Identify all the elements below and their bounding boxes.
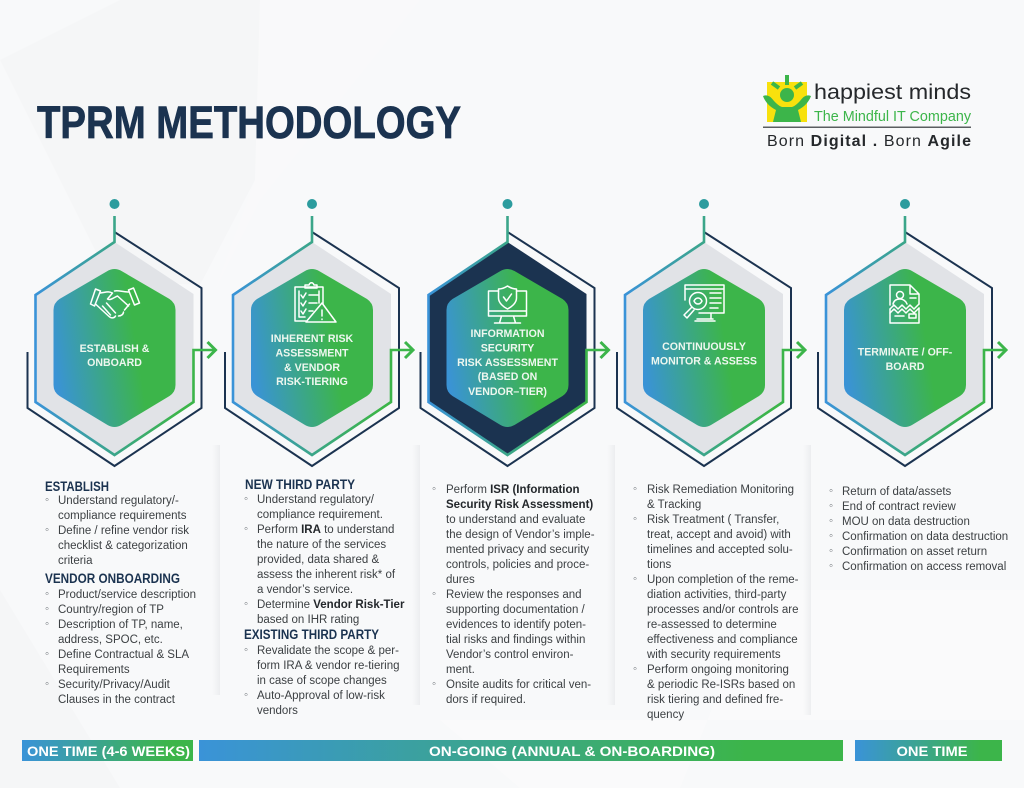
label: RISK-TIERING [276,376,348,388]
heading: establish: ESTABLISH [45,479,109,494]
existing third party list: ◦ [244,644,248,656]
text column 4: monitoring details: ◦ [633,513,637,525]
text column 3: ISR details: dors if required. [446,694,526,706]
text column 2: new and existing third party [244,477,405,717]
label: (BASED ON [478,371,537,383]
text column 3: ISR details: Security Risk Assessment) [446,499,593,511]
establish list: ◦ [45,494,49,506]
step 1: establish and onboard [28,199,216,466]
icon: handshake [90,288,140,318]
new third party list [244,493,405,626]
label: INFORMATION [471,328,544,340]
logo slogan: Born Digital . Born Agile [767,133,971,150]
title: TPRM METHODOLOGY [37,97,461,148]
vendor onboarding list: ◦ [45,603,49,615]
existing third party list: vendors [257,705,298,717]
heading: vendor onboarding: VENDOR ONBOARDING [45,571,180,586]
vendor onboarding list: Product/service description [58,589,196,601]
text column 3: ISR details: ◦ [432,588,436,600]
text column 4: monitoring details: re-assessed to determine [647,619,777,631]
text column 3: ISR details: ◦ [432,678,436,690]
text column 5: termination details: Confirmation on data destruction [842,531,1008,543]
text column 3: ISR details: ment. [446,664,475,676]
existing third party list: Revalidate the scope & per- [257,645,399,657]
vendor onboarding list: ◦ [45,588,49,600]
text column 4: monitoring details: timelines and accepted solu- [647,544,793,556]
vendor onboarding list: Clauses in the contract [58,694,176,706]
text column 3: ISR details: evidences to identify poten- [446,619,586,631]
timeline bar: on-going [199,740,843,761]
heading: new third party: NEW THIRD PARTY [245,477,355,492]
establish list: criteria [58,555,93,567]
logo wordmark: happiest minds [814,81,971,104]
text column 5: termination details: Confirmation on access removal [842,561,1006,573]
label: ASSESSMENT [276,348,349,360]
icon: monitor with magnifier [684,285,724,321]
text column 4: monitoring details: risk tiering and defined fre- [647,694,783,706]
icon: monitor with shield [488,286,526,323]
text column 5: termination details: ◦ [829,500,833,512]
vendor onboarding list: address, SPOC, etc. [58,634,163,646]
logo mark [763,75,811,122]
step 2: inherent risk assessment [225,199,413,466]
label: ONBOARD [87,357,142,369]
text column 5: termination details: ◦ [829,515,833,527]
text column 4: monitoring details: Risk Treatment ( Transfer, [647,514,779,526]
text column 3: ISR details: controls, policies and proce- [446,559,589,571]
text column 3: ISR details: the design of Vendor’s imple- [446,529,595,541]
label: BOARD [886,361,925,373]
existing third party list [244,644,400,717]
text column 4: monitoring details: Upon completion of the reme- [647,574,799,586]
new third party list: ◦ [244,523,248,535]
label: & VENDOR [284,362,340,374]
text column 5: termination details: ◦ [829,560,833,572]
text column 4: monitoring details: Perform ongoing monitoring [647,664,789,676]
text column 5: termination details: MOU on data destruction [842,516,970,528]
text column 4: monitoring details: ◦ [633,483,637,495]
text column 4: monitoring details: Risk Remediation Monitoring [647,484,794,496]
text column 4: monitoring details: quency [647,709,684,721]
step 5: terminate / off-board [818,199,1006,466]
existing third party list: ◦ [244,689,248,701]
new third party list: Perform IRA to understand [257,524,394,536]
text column 3: ISR details: supporting documentation / [446,604,586,616]
timeline bar: one time 4-6 weeks [22,740,193,761]
vendor onboarding list: Description of TP, name, [58,619,183,631]
icon: torn document [890,285,919,323]
new third party list: the nature of the services [257,539,386,551]
new third party list: Understand regulatory/ [257,494,375,506]
vendor onboarding list: Country/region of TP [58,604,164,616]
vendor onboarding list: ◦ [45,678,49,690]
text column 4: monitoring details: effectiveness and compliance [647,634,798,646]
establish list: Understand regulatory/- [58,495,179,507]
text column 4: monitoring details: & Tracking [647,499,701,511]
label: MONITOR & ASSESS [651,356,757,368]
new third party list: ◦ [244,493,248,505]
text column 5: termination details [829,485,1008,573]
vendor onboarding list: ◦ [45,648,49,660]
establish list: ◦ [45,524,49,536]
new third party list: compliance requirement. [257,509,383,521]
text column 5: termination details: ◦ [829,545,833,557]
timeline bar: one time [855,740,1002,761]
text column 5: termination details: End of contract review [842,501,956,513]
text column 4: monitoring details [633,483,799,721]
text column 4: monitoring details: treat, accept and avoid) with [647,529,791,541]
vendor onboarding list [45,588,196,706]
logo: happiest minds [763,75,972,150]
timeline bar: one time: ONE TIME [896,743,968,759]
text column 3: ISR details: to understand and evaluate [446,514,585,526]
text column 3: ISR details [432,483,595,706]
existing third party list: Auto-Approval of low-risk [257,690,385,702]
existing third party list: in case of scope changes [257,675,387,687]
text column 3: ISR details: Vendor’s control environ- [446,649,574,661]
text column 4: monitoring details: ◦ [633,573,637,585]
text column 4: monitoring details: diation activities, third-party [647,589,787,601]
existing third party list: form IRA & vendor re-tiering [257,660,400,672]
new third party list: based on IHR rating [257,614,359,626]
icon: clipboard with warning [295,283,336,322]
vendor onboarding list: Define Contractual & SLA [58,649,189,661]
establish list: compliance requirements [58,510,187,522]
new third party list: a vendor’s service. [257,584,353,596]
step 3: information security risk assessment [420,199,608,466]
text column 1: establish and vendor onboarding [45,479,196,706]
label: VENDOR–TIER) [468,386,547,398]
text column 4: monitoring details: with security requirements [646,649,781,661]
label: CONTINUOUSLY [662,341,746,353]
text column 5: termination details: Confirmation on asset return [842,546,987,558]
text column 3: ISR details: Onsite audits for critical ven- [446,679,591,691]
text column 3: ISR details: Perform ISR (Information [446,484,580,496]
text column 4: monitoring details: & periodic Re-ISRs based on [647,679,795,691]
label: RISK ASSESSMENT [457,357,558,369]
establish list: Define / refine vendor risk [58,525,189,537]
text column 5: termination details: ◦ [829,530,833,542]
text column 4: monitoring details: ◦ [633,663,637,675]
label: TERMINATE / OFF- [858,346,953,358]
text column 5: termination details: ◦ [829,485,833,497]
text column 4: monitoring details: processes and/or controls are [647,604,798,616]
new third party list: ◦ [244,598,248,610]
timeline bar: on-going: ON-GOING (ANNUAL & ON-BOARDING) [429,743,715,759]
vendor onboarding list: ◦ [45,618,49,630]
establish list [45,494,189,567]
timeline bar: one time 4-6 weeks: ONE TIME (4-6 WEEKS) [27,743,190,759]
label: INHERENT RISK [271,333,354,345]
vendor onboarding list: Security/Privacy/Audit [58,679,171,691]
logo tagline: The Mindful IT Company [814,109,972,125]
heading: existing third party: EXISTING THIRD PARTY [244,627,379,642]
new third party list: assess the inherent risk* of [257,569,396,581]
label: ESTABLISH & [80,343,150,355]
text column 3: ISR details: mented privacy and security [446,544,589,556]
text column 3: ISR details: ◦ [432,483,436,495]
step 4: continuously monitor and assess [617,199,805,466]
new third party list: provided, data shared & [257,554,379,566]
label: SECURITY [481,342,534,354]
text column 3: ISR details: Review the responses and [446,589,582,601]
establish list: checklist & categorization [58,540,188,552]
text column 3: ISR details: tial risks and findings within [446,634,585,646]
new third party list: Determine Vendor Risk-Tier [257,599,405,611]
text column 5: termination details: Return of data/assets [842,486,952,498]
text column 3: ISR details: dures [446,574,475,586]
text column 4: monitoring details: tions [647,559,672,571]
vendor onboarding list: Requirements [58,664,130,676]
